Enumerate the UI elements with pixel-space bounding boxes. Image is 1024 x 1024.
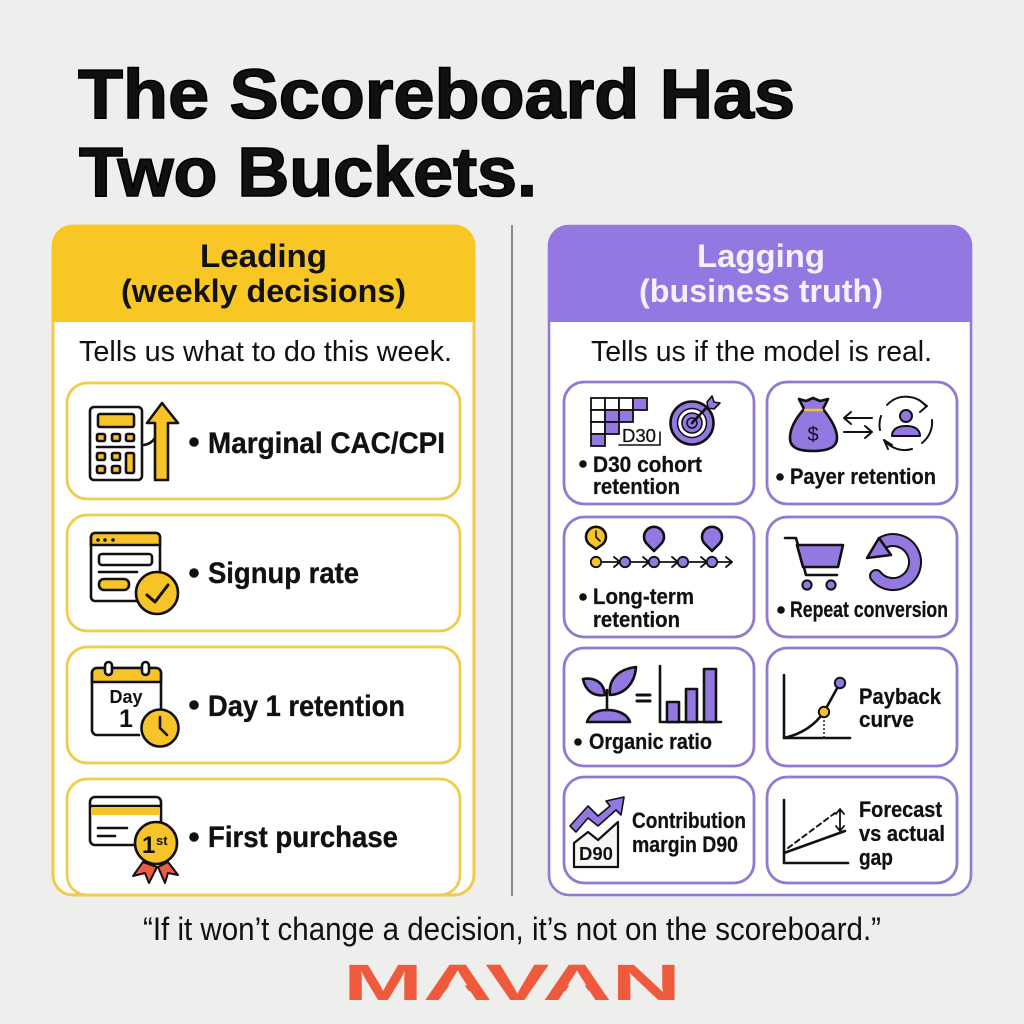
label: organic ratio: Organic ratio — [589, 729, 712, 754]
panel: lagging — [548, 225, 972, 895]
subheading: leading: Tells us what to do this week. — [79, 336, 452, 368]
label: payback curve: curve — [859, 707, 914, 732]
card: organic ratio — [564, 648, 754, 766]
icon: cohort grid and target — [591, 396, 720, 446]
icon: money bag and returning user — [790, 397, 932, 451]
label: payer retention: Payer retention — [790, 464, 936, 489]
label: long-term retention — [579, 584, 694, 632]
card: D30 cohort retention — [564, 382, 754, 504]
icon: sprout equals bars — [583, 666, 721, 722]
label: contribution margin D90: Contribution — [632, 808, 746, 833]
label: D30 cohort retention: D30 cohort — [593, 452, 702, 477]
icon: cohort grid and target: D30 — [622, 426, 656, 446]
title: Two Buckets. — [79, 133, 537, 211]
label: signup rate: Signup rate — [208, 557, 359, 590]
label: forecast vs actual gap — [859, 797, 945, 870]
panel header: leading — [52, 225, 475, 322]
icon: calendar with clock — [92, 662, 178, 746]
icon: payback curve chart — [784, 675, 850, 738]
card: long-term retention — [564, 517, 754, 637]
card: first purchase — [67, 779, 460, 895]
icon: retention timeline — [586, 527, 732, 567]
label: forecast vs actual gap: gap — [859, 845, 893, 870]
icon: credit card with first medal — [90, 797, 178, 883]
card: payback curve — [767, 648, 957, 766]
label: forecast vs actual gap: Forecast — [859, 797, 942, 822]
card: payer retention — [767, 382, 957, 504]
card: forecast vs actual gap — [767, 777, 957, 883]
icon: credit card with first medal: st — [156, 833, 168, 848]
label: payback curve: Payback — [859, 684, 941, 709]
subheading: lagging: Tells us if the model is real. — [591, 336, 932, 368]
panel header: lagging: Lagging — [697, 238, 825, 274]
panel: leading — [52, 225, 475, 895]
label: contribution margin D90: margin D90 — [632, 832, 738, 857]
label: long-term retention: Long-term — [593, 584, 694, 609]
logo: MAVAN — [343, 954, 681, 1011]
label: long-term retention: retention — [593, 607, 680, 632]
card: repeat conversion — [767, 517, 957, 637]
label: D30 cohort retention: retention — [593, 474, 680, 499]
icon: calendar with clock: Day — [109, 687, 143, 707]
title: The Scoreboard Has — [78, 55, 795, 133]
icon: credit card with first medal: 1 — [142, 832, 155, 859]
title — [78, 55, 795, 211]
icon: D90 rising arrow: D90 — [579, 844, 613, 864]
icon: forecast vs actual chart — [784, 800, 848, 863]
label: day 1 retention: Day 1 retention — [208, 690, 405, 723]
label: payback curve — [859, 684, 941, 732]
icon: money bag and returning user: $ — [807, 424, 819, 446]
label: marginal CAC/CPI: Marginal CAC/CPI — [208, 427, 445, 460]
card: contribution margin D90 — [564, 777, 754, 883]
label: first purchase: First purchase — [208, 821, 398, 854]
icon: D90 rising arrow — [570, 797, 624, 867]
panel header: lagging: (business truth) — [639, 273, 883, 309]
panel header: leading: Leading — [200, 238, 327, 274]
quote: “If it won’t change a decision, it’s not on the scoreboard.” — [143, 911, 881, 947]
panel header: lagging — [548, 225, 972, 322]
label: repeat conversion: Repeat conversion — [790, 597, 948, 622]
label: D30 cohort retention — [579, 452, 702, 499]
panel header: leading: (weekly decisions) — [121, 273, 406, 309]
label: contribution margin D90 — [632, 808, 746, 857]
icon: cart and repeat arrow — [785, 538, 915, 590]
icon: calendar with clock: 1 — [119, 705, 133, 733]
card: signup rate — [67, 515, 460, 631]
card: marginal CAC/CPI — [67, 383, 460, 499]
label: forecast vs actual gap: vs actual — [859, 821, 945, 846]
icon: calculator with up arrow — [90, 403, 178, 480]
icon: signup form with check — [91, 533, 178, 614]
card: day 1 retention — [67, 647, 460, 763]
logo: MAVAN: MAVAN — [343, 954, 681, 1011]
